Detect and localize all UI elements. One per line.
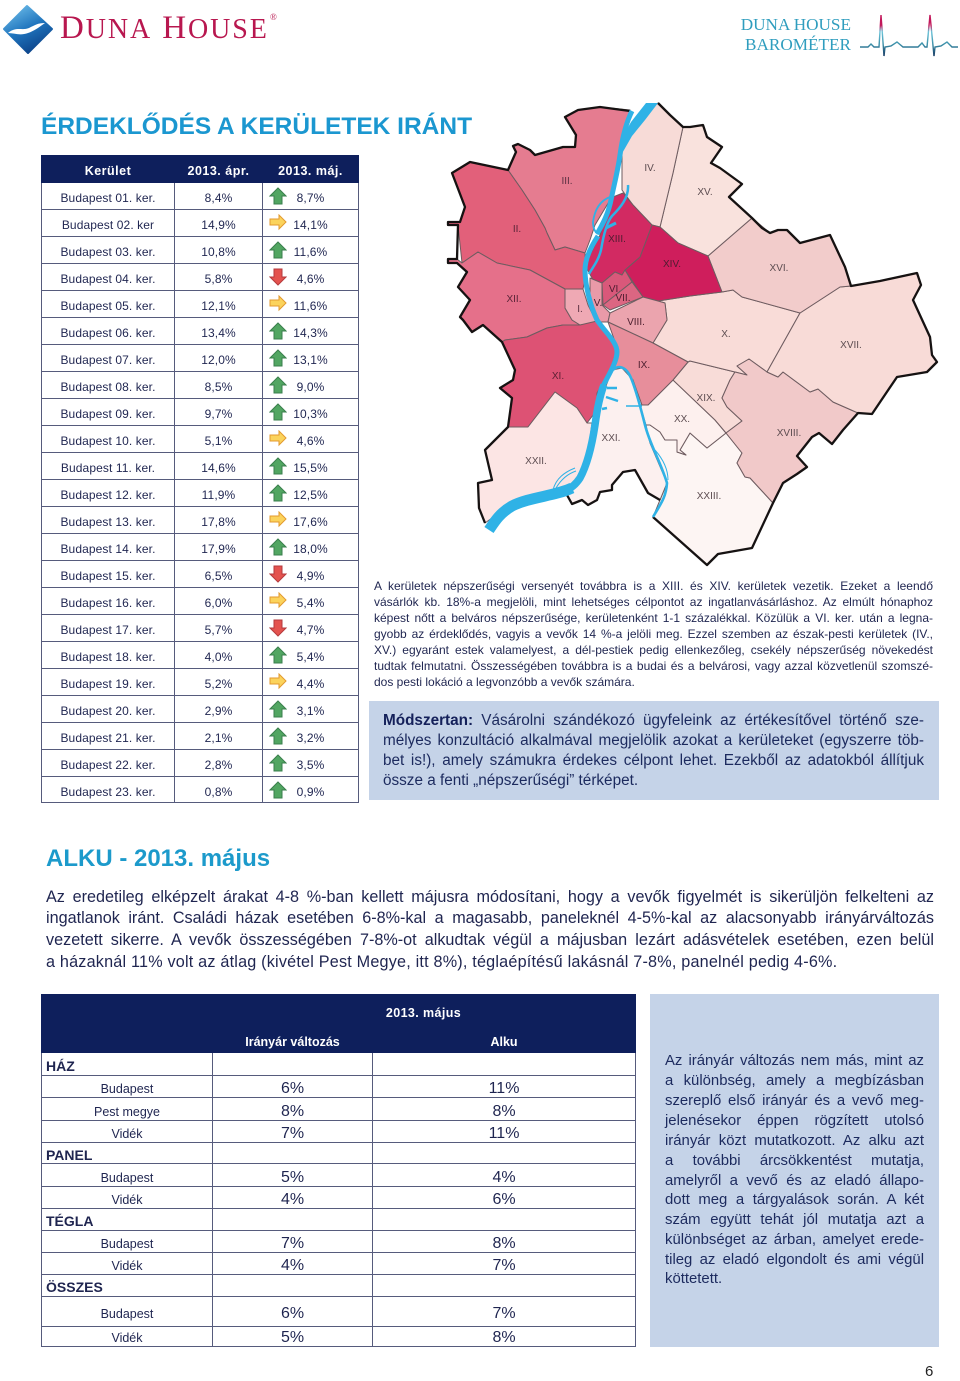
table: district popularity: Budapest 10. ker.: [60, 434, 156, 448]
map: Budapest districts: [446, 102, 938, 566]
table: district popularity: 4,9%: [297, 569, 324, 583]
table: district popularity: 2,9%: [205, 704, 232, 718]
panel: methodology: mélyes konzultáció alkalmával megjelölik azokat a kerületeket (egyszerre töb-: [383, 732, 924, 749]
panel: methodology: össze a fenti „népszerűségi” térképet.: [383, 772, 638, 789]
text block: district commentary: tudtak felmutatni. Összességében továbbra is a budai és a belvárosi, vagy azzal közvetlenül szomszé-: [374, 659, 933, 673]
table: district popularity: 9,7%: [205, 407, 232, 421]
district: III: III.: [561, 176, 573, 187]
table: district popularity: 11,6%: [294, 245, 327, 259]
logo: Duna House: ®: [270, 12, 279, 22]
barometer wordmark: [741, 15, 851, 54]
table: district popularity: Budapest 09. ker.: [60, 407, 156, 421]
district: XIII: XIII.: [608, 234, 626, 245]
table: asking price change and bargain: Budapest: [101, 1307, 153, 1321]
table: district popularity: 9,0%: [297, 380, 324, 394]
table: district popularity: Budapest 08. ker.: [60, 380, 156, 394]
table: district popularity: 5,2%: [205, 677, 232, 691]
table: district popularity: 6,5%: [205, 569, 232, 583]
table: district popularity: 14,1%: [293, 218, 328, 232]
table: district popularity: 17,6%: [293, 515, 328, 529]
district: XXI: [567, 368, 667, 505]
table: district popularity: 5,7%: [205, 623, 232, 637]
table: district popularity: 5,1%: [205, 434, 232, 448]
table: asking price change and bargain: 6%: [492, 1191, 516, 1208]
text block: bargaining commentary: Az eredetileg elképzelt árakat 4-8 %-ban kellett májusra módosítani, hogy a vevők figyelmét is sikerüljön felkelteni az: [46, 888, 934, 906]
district: XIII: [585, 193, 652, 283]
table: asking price change and bargain: Vidék: [111, 1127, 143, 1141]
district: VII: [603, 282, 643, 310]
table: asking price change and bargain: 4%: [281, 1257, 304, 1274]
table: district popularity: 2,8%: [205, 758, 232, 772]
table: district popularity: Budapest 06. ker.: [60, 326, 156, 340]
table: district popularity: Budapest 17. ker.: [60, 623, 156, 637]
table: district popularity: 6,0%: [205, 596, 232, 610]
district: IX: IX.: [638, 360, 650, 371]
table: asking price change and bargain: Vidék: [111, 1331, 143, 1345]
district: XVI: [708, 218, 851, 313]
panel: explanation of asking price and bargain: a további árcsökkentést mutatja,: [665, 1153, 924, 1169]
text block: district commentary: vásárlók kb. 18%-a megjelöli, mint lehetséges célpontot az ingatlanvásárláshoz. Az elmúlt hónaphoz: [374, 595, 933, 609]
heading: district interest: ÉRDEKLŐDÉS A KERÜLETEK IRÁNT: [41, 113, 472, 140]
district: X: X.: [721, 329, 731, 340]
panel: explanation of asking price and bargain: amelyről a vevő és az eladó állapo-: [665, 1173, 924, 1189]
district: XI: [500, 321, 617, 427]
panel: explanation of asking price and bargain: irányár közt mutatkozott. Az alku azt: [665, 1133, 924, 1149]
panel: methodology: [369, 701, 939, 800]
table: district popularity: Budapest 03. ker.: [60, 245, 156, 259]
table: district popularity: 10,8%: [201, 245, 236, 259]
district: XXIII: [646, 425, 773, 565]
barometer wordmark: BAROMÉTER: [745, 35, 851, 54]
panel: explanation of asking price and bargain: szám együtt tehát jól mutatja azt a: [665, 1212, 924, 1228]
table: asking price change and bargain: 11%: [489, 1080, 519, 1097]
table: district popularity: 4,0%: [205, 650, 232, 664]
map outline: [448, 103, 937, 565]
table: asking price change and bargain: Budapest: [101, 1237, 153, 1251]
table: district popularity: Budapest 14. ker.: [60, 542, 156, 556]
table: asking price change and bargain: 7%: [281, 1125, 304, 1142]
table: asking price change and bargain: 6%: [281, 1305, 304, 1322]
table: district popularity: 8,7%: [297, 191, 324, 205]
table: district popularity: 17,9%: [201, 542, 236, 556]
table: asking price change and bargain: [41, 994, 636, 1347]
table: asking price change and bargain: 7%: [492, 1257, 516, 1274]
table: district popularity: 5,4%: [297, 596, 324, 610]
table: district popularity: 4,6%: [297, 272, 324, 286]
table: district popularity: [41, 155, 359, 803]
table: district popularity: 4,7%: [297, 623, 324, 637]
table: district popularity: Budapest 01. ker.: [60, 191, 156, 205]
district: VII: VII.: [615, 293, 631, 304]
table: district popularity: 14,9%: [201, 218, 236, 232]
table: district popularity: 17,8%: [201, 515, 236, 529]
table: district popularity: Budapest 13. ker.: [60, 515, 156, 529]
district: IV: IV.: [644, 163, 656, 174]
text block: district commentary: A kerületek népszerűségi versenyét továbbra is a XIII. és XIV. kerületek vezetik. Ezeket a leendő: [374, 579, 933, 593]
table: district popularity: 3,5%: [297, 758, 324, 772]
table: asking price change and bargain: 8%: [281, 1102, 304, 1120]
table: district popularity: 10,3%: [293, 407, 328, 421]
logo: Duna House Barométer: [741, 14, 958, 56]
panel: explanation of asking price and bargain: különbséget az árban, amelyet erede-: [665, 1232, 924, 1248]
table: district popularity: 18,0%: [293, 542, 328, 556]
district: XIV: [625, 225, 722, 301]
text block: bargaining commentary: vezetett sikerre. A vevők összességében 7-8%-ot alkudtak végül a májusban lezárt adásvételek esetében, ezen belül: [46, 930, 934, 948]
district: XXII: XXII.: [525, 456, 547, 467]
table: district popularity: 3,2%: [297, 731, 324, 745]
river Danube: [489, 103, 668, 530]
table: asking price change and bargain: 7%: [281, 1235, 304, 1252]
text block: district commentary: [374, 579, 933, 689]
table: asking price change and bargain: Alku: [490, 1034, 518, 1048]
page number: 6: [925, 1363, 933, 1380]
district: XXIII: XXIII.: [697, 491, 721, 502]
table: district popularity: 12,1%: [201, 299, 236, 313]
table: district popularity: Budapest 16. ker.: [60, 596, 156, 610]
district: VI: VI.: [609, 284, 621, 295]
district: XXI: XXI.: [602, 433, 620, 444]
table: district popularity: 13,4%: [201, 326, 236, 340]
table: asking price change and bargain: 7%: [492, 1305, 516, 1322]
barometer wordmark: DUNA HOUSE: [741, 15, 851, 34]
table: asking price change and bargain: 8%: [492, 1102, 516, 1120]
district: XVIII: [722, 359, 858, 503]
district: XX: XX.: [674, 414, 690, 425]
table: district popularity: Budapest 04. ker.: [60, 272, 156, 286]
panel: explanation of asking price and bargain: szereplő első irányár és a vevő meg-: [665, 1093, 924, 1109]
district: XIX: XIX.: [697, 393, 715, 404]
district: XII: XII.: [506, 294, 522, 305]
table: district popularity: Kerület: [85, 164, 131, 178]
table: asking price change and bargain: 8%: [492, 1329, 516, 1346]
panel: explanation of asking price and bargain: dott meg a tárgyalások során. A két: [665, 1192, 924, 1208]
district: XXII: [478, 392, 592, 523]
district: XIV: XIV.: [663, 259, 681, 270]
text block: district commentary: dos pesti lokáció a legvonzóbb a vevők számára.: [374, 675, 635, 689]
district: IV: [622, 103, 683, 227]
district: XV: XV.: [697, 187, 713, 198]
table: district popularity: 2013. ápr.: [188, 164, 250, 178]
table: asking price change and bargain: 5%: [281, 1329, 304, 1346]
table: district popularity: Budapest 11. ker.: [61, 461, 155, 475]
district: XVIII: XVIII.: [777, 428, 801, 439]
icon: blue diamond: [3, 5, 53, 54]
table: asking price change and bargain: 4%: [492, 1168, 516, 1186]
panel: explanation of asking price and bargain: köttetett.: [665, 1271, 722, 1287]
district: X: [653, 290, 800, 375]
panel: methodology: Módszertan: Vásárolni szándékozó ügyfeleink az értékesítővel történő sze-: [383, 712, 924, 729]
table: asking price change and bargain: 11%: [489, 1125, 519, 1142]
panel: explanation of asking price and bargain: a különbség, amely a megbízásban: [665, 1073, 924, 1089]
table: asking price change and bargain: Irányár változás: [245, 1034, 340, 1048]
table: district popularity: 5,4%: [297, 650, 324, 664]
panel: explanation of asking price and bargain: Az irányár változás nem más, mint az: [665, 1053, 924, 1069]
district: XX: [640, 380, 726, 455]
table: district popularity: 13,1%: [293, 353, 328, 367]
table: district popularity: Budapest 21. ker.: [60, 731, 156, 745]
table: district popularity: 12,5%: [293, 488, 328, 502]
text block: bargaining commentary: [46, 888, 934, 970]
table: district popularity: 14,6%: [201, 461, 236, 475]
text block: district commentary: XV.) egyaránt estek valamelyest, a dél-pestiek pedig ellenkezőleg, csekély népszerűség növekedést: [374, 643, 933, 657]
panel: explanation of asking price and bargain: tileg az eladó elgondolt és ami végül: [665, 1252, 924, 1268]
table: asking price change and bargain: TÉGLA: [46, 1213, 93, 1229]
table: district popularity: Budapest 05. ker.: [60, 299, 156, 313]
table: asking price change and bargain: 8%: [492, 1235, 516, 1252]
table: district popularity: Budapest 07. ker.: [60, 353, 156, 367]
table: asking price change and bargain: Vidék: [111, 1259, 143, 1273]
table: district popularity: 11,9%: [202, 488, 235, 502]
table: district popularity: 2,1%: [205, 731, 232, 745]
table: asking price change and bargain: 4%: [281, 1191, 304, 1208]
district: VIII: [608, 297, 667, 343]
text block: district commentary: képest nőtt a belváros népszerűsége, kerületenként 1-1 százalékkal. Közülük a VI. ker. után a legna-: [374, 611, 933, 625]
district: VIII: VIII.: [627, 317, 645, 328]
district: I: I.: [577, 304, 583, 315]
logo: Duna House: [3, 5, 279, 54]
district: XVI: XVI.: [770, 263, 788, 274]
panel: methodology: bet is!), amely számukra érdekes célpont lehet. Ezekből az adatokból állítjuk: [383, 752, 924, 769]
table: district popularity: 11,6%: [294, 299, 327, 313]
table: district popularity: Budapest 02. ker: [62, 218, 154, 232]
district: II: [448, 162, 586, 289]
table: district popularity: Budapest 23. ker.: [60, 784, 156, 798]
text block: bargaining commentary: a házaknál 11% volt az átlag (kivétel Pest Megye, itt 8%), téglaépítésű lakásnál 7-8%, panelnél pedig 4-6%.: [46, 952, 837, 970]
district: IX: [608, 322, 688, 405]
table: asking price change and bargain: 6%: [281, 1080, 304, 1097]
district: VI: [602, 270, 632, 305]
table: district popularity: 4,6%: [297, 434, 324, 448]
table: district popularity: 3,1%: [297, 704, 324, 718]
district: I: [565, 289, 597, 325]
table: asking price change and bargain: Budapest: [101, 1170, 153, 1184]
table: district popularity: Budapest 20. ker.: [60, 704, 156, 718]
table: district popularity: 14,3%: [293, 326, 328, 340]
panel: explanation of asking price and bargain: [650, 994, 939, 1347]
table: district popularity: 8,5%: [205, 380, 232, 394]
heading: bargaining: ALKU - 2013. május: [46, 845, 270, 872]
table: district popularity: 15,5%: [293, 461, 328, 475]
table: district popularity: Budapest 12. ker.: [60, 488, 156, 502]
district: II: II.: [513, 224, 521, 235]
district: XI: XI.: [552, 371, 564, 382]
table: asking price change and bargain: PANEL: [46, 1146, 92, 1162]
table: district popularity: 0,9%: [297, 784, 324, 798]
table: asking price change and bargain: 2013. május: [386, 1006, 461, 1020]
table: district popularity: 0,8%: [205, 784, 232, 798]
table: asking price change and bargain: ÖSSZES: [46, 1279, 103, 1295]
district: XVII: [767, 273, 937, 414]
table: district popularity: 4,4%: [297, 677, 324, 691]
district: V: [590, 278, 610, 322]
text block: district commentary: gyobb az érdeklődés, vagyis a vevők 14 %-a jelöli meg. Ezzel szemben az észak-pesti kerületek (IV.,: [374, 627, 933, 641]
icon: ECG line: [860, 14, 958, 56]
table: district popularity: 5,8%: [205, 272, 232, 286]
table: district popularity: 8,4%: [205, 191, 232, 205]
table: asking price change and bargain: Vidék: [111, 1193, 143, 1207]
table: asking price change and bargain: Budapest: [101, 1082, 153, 1096]
table: district popularity: Budapest 22. ker.: [60, 758, 156, 772]
text block: bargaining commentary: ingatlanok iránt. Családi házak esetében 6-8%-kal a magasabb, paneleknél 4-5%-kal az alacsonyabb irányárváltozás: [46, 909, 934, 927]
wordmark: DUNA HOUSE: [60, 10, 269, 46]
table: district popularity: Budapest 15. ker.: [60, 569, 156, 583]
table: district popularity: 2013. máj.: [278, 164, 343, 178]
table: asking price change and bargain: HÁZ: [46, 1058, 75, 1074]
table: district popularity: Budapest 18. ker.: [60, 650, 156, 664]
table: asking price change and bargain: Pest megye: [94, 1104, 160, 1118]
district: XVII: XVII.: [840, 340, 862, 351]
table: asking price change and bargain: 5%: [281, 1168, 304, 1186]
district: XV: [660, 125, 752, 256]
district: III: [508, 107, 630, 253]
table: district popularity: 12,0%: [201, 353, 236, 367]
district: XIX: [673, 361, 742, 433]
district: XII: [448, 252, 580, 342]
panel: explanation of asking price and bargain: jelenésekor éppen rögzített utolsó: [665, 1113, 924, 1129]
district: V: V.: [594, 298, 602, 309]
table: district popularity: Budapest 19. ker.: [60, 677, 156, 691]
